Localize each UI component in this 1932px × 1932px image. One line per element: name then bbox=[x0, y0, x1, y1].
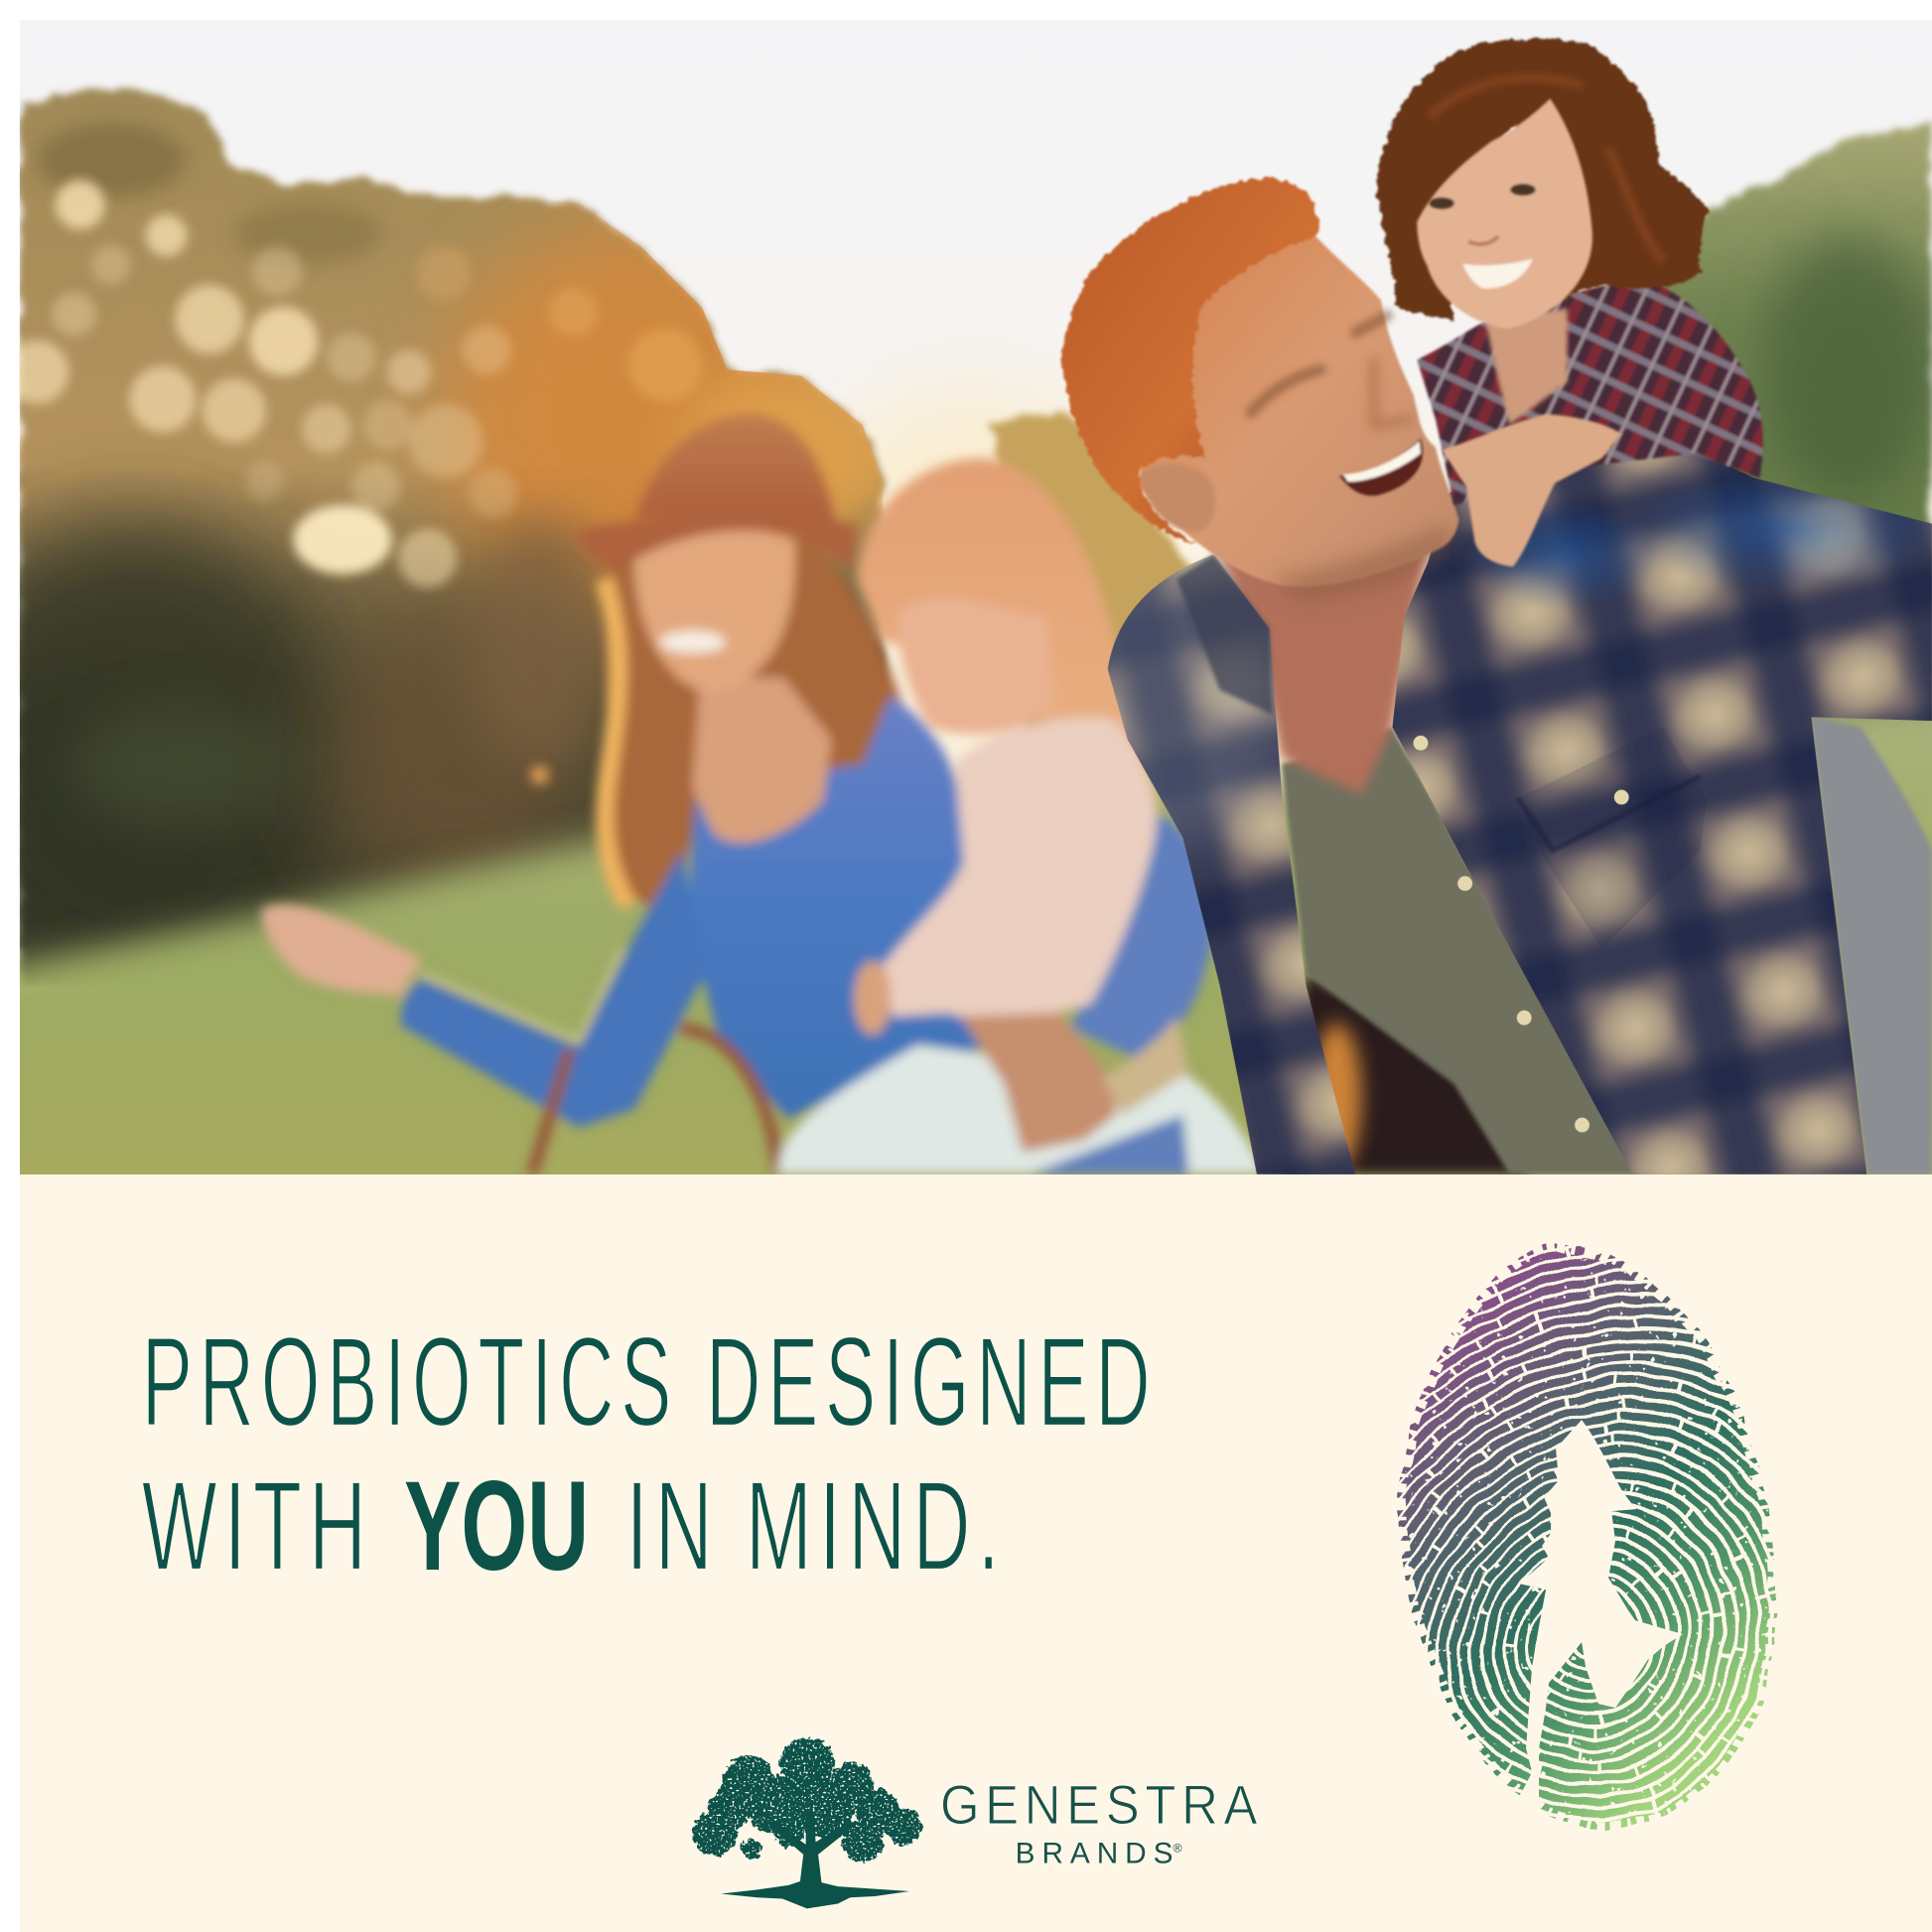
man face bbox=[1140, 204, 1458, 587]
headline: PROBIOTICS DESIGNED bbox=[142, 1311, 1157, 1453]
woman neck bbox=[692, 678, 832, 843]
girl face bbox=[897, 598, 1053, 735]
woman hair bbox=[599, 542, 901, 909]
man beard shadow bbox=[1269, 523, 1453, 604]
icon: oak tree bbox=[692, 1737, 921, 1908]
wordmark: ® bbox=[1173, 1841, 1182, 1855]
woman face bbox=[633, 528, 795, 692]
ground bbox=[721, 1879, 909, 1908]
boy face bbox=[1417, 98, 1592, 329]
shirt pocket bbox=[1518, 727, 1707, 949]
wordmark bbox=[940, 1773, 1263, 1870]
background trees left bbox=[0, 86, 899, 986]
belt bbox=[1103, 1017, 1189, 1115]
man nose shadow bbox=[1374, 357, 1412, 425]
background trees right bbox=[1660, 117, 1932, 731]
boy hair bbox=[1376, 39, 1709, 322]
shirt buttons bbox=[1414, 736, 1629, 1133]
man bbox=[1061, 178, 1932, 1182]
logo: Genestra Brands bbox=[692, 1737, 1263, 1908]
chest bbox=[1213, 542, 1430, 794]
mermaid silhouette bbox=[1516, 1420, 1683, 1803]
girl trousers bbox=[778, 1044, 1263, 1174]
cream lower panel bbox=[20, 1174, 1932, 1932]
headline: IN bbox=[625, 1455, 720, 1597]
headline: YOU bbox=[404, 1455, 589, 1597]
dark shadow under shirt bbox=[1282, 973, 1528, 1174]
woman hat bbox=[577, 414, 857, 569]
woman waist bbox=[1029, 1115, 1189, 1174]
boy's trousers bbox=[1811, 717, 1932, 1174]
man smile bbox=[1339, 439, 1423, 495]
headline bbox=[142, 1311, 1157, 1597]
bokeh highlights bbox=[5, 180, 702, 785]
man eyes shadow bbox=[1251, 316, 1387, 413]
grass field bbox=[20, 717, 1932, 1174]
grey tee bbox=[1282, 727, 1639, 1174]
wordmark: GENESTRA bbox=[940, 1773, 1263, 1836]
wordmark: BRANDS bbox=[1016, 1837, 1173, 1869]
mother's arm bbox=[1072, 813, 1212, 1059]
boy neck bbox=[1486, 308, 1568, 425]
woman hand bbox=[261, 904, 421, 996]
panel: family photo bbox=[0, 20, 1932, 1232]
girl hair bbox=[857, 459, 1148, 813]
girl hand bbox=[854, 961, 891, 1035]
headline: WITH bbox=[142, 1455, 373, 1597]
man ear bbox=[1140, 464, 1215, 532]
basket handle bbox=[532, 1029, 778, 1174]
boy bbox=[1376, 39, 1763, 567]
trunk and branches bbox=[770, 1811, 854, 1885]
headline: MIND. bbox=[746, 1455, 1007, 1597]
pocket flap edge bbox=[1518, 776, 1701, 850]
boy smile bbox=[1462, 259, 1533, 289]
boy shirt bbox=[1417, 277, 1763, 505]
boy hair highlight bbox=[1430, 77, 1663, 261]
woman smile bbox=[659, 630, 726, 653]
fingerprint ridges bbox=[1355, 1207, 1811, 1861]
man hair bbox=[1061, 178, 1320, 545]
icon: fingerprint with mermaid bbox=[1355, 1207, 1811, 1861]
boy hand bbox=[1442, 414, 1621, 567]
boy nose bbox=[1468, 236, 1498, 244]
woman top bbox=[688, 696, 986, 1119]
background tree behind girl bbox=[985, 407, 1193, 816]
shirt right with plaid bbox=[1355, 419, 1932, 1182]
woman arm bbox=[400, 850, 705, 1128]
woman sleeve highlight bbox=[421, 949, 622, 1041]
boy eyes bbox=[1430, 185, 1535, 208]
shirt left with plaid bbox=[1072, 530, 1368, 1182]
left collar bbox=[1176, 554, 1273, 715]
woman and girl group bbox=[261, 414, 1263, 1174]
woman hand on girl bbox=[961, 1013, 1115, 1152]
girl sweater bbox=[878, 717, 1157, 1021]
